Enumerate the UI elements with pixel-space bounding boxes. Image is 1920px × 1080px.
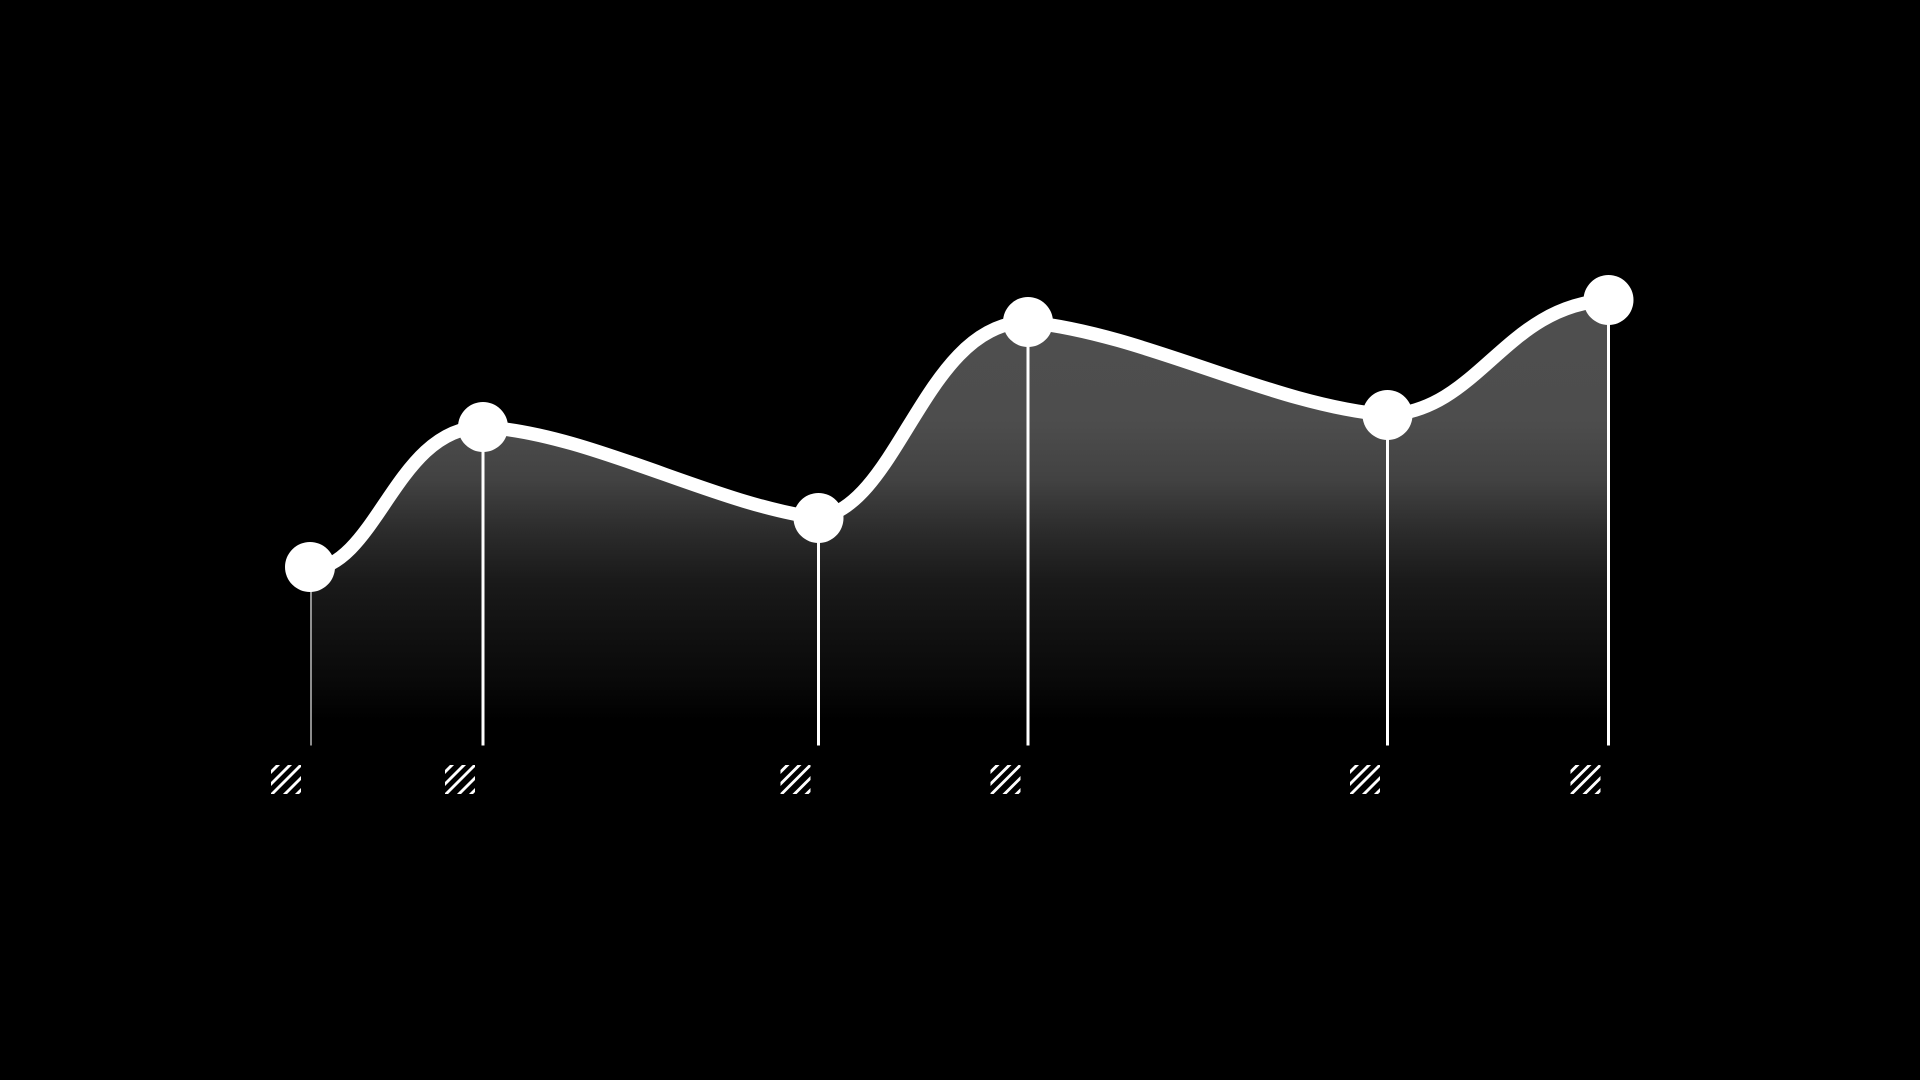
area line chart — [271, 275, 1634, 794]
data points — [285, 275, 1634, 592]
hatched placeholder labels — [270, 764, 1626, 821]
trend line — [310, 300, 1609, 570]
area fill under curve — [310, 300, 1609, 745]
vertical drop lines — [311, 322, 1608, 746]
